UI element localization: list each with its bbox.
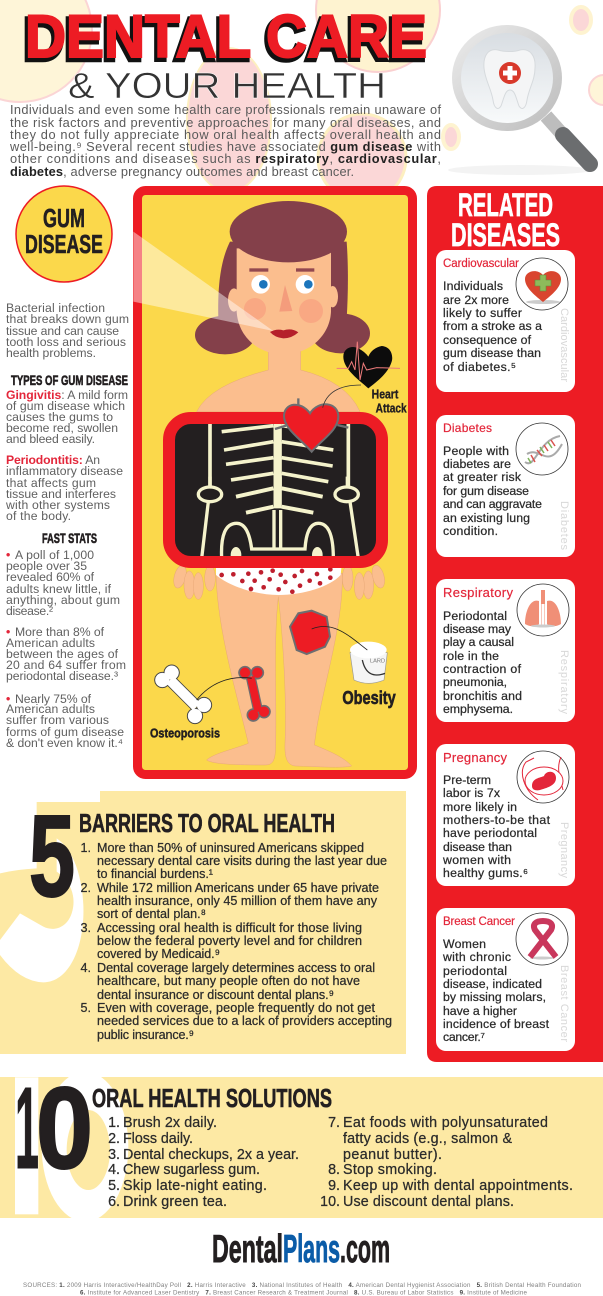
icon: fetus <box>517 751 569 803</box>
barrier list: Even with coverage, people frequently do not get <box>97 1001 376 1015</box>
solutions list right: 10. <box>320 1194 340 1210</box>
stat: 75 percent: & don't even know it.⁴ <box>6 736 123 750</box>
stat: poll: disease.² <box>6 604 53 618</box>
card: breast cancer: disease, indicated <box>443 977 542 991</box>
barrier list: health insurance, only 45 million of them have any <box>97 894 378 908</box>
panel: 10 oral health solutions <box>0 1077 603 1218</box>
panel: gum disease sidebar <box>5 186 129 750</box>
card: cardiovascular: are 2x more <box>443 293 509 307</box>
heart attack callout <box>275 342 407 452</box>
barrier list: Accessing oral health is difficult for those living <box>97 921 362 935</box>
big number 10: 1 <box>15 1063 39 1193</box>
barrier list: Dental coverage largely determines access to oral <box>97 961 375 975</box>
logo: DentalPlans.com: Plans <box>283 1228 340 1271</box>
stat: 8 percent: American adults <box>6 636 95 650</box>
card: diabetes: Diabetes <box>443 421 492 435</box>
solutions list right: 9. <box>328 1178 340 1194</box>
card: pregnancy: Pre-term <box>443 773 491 787</box>
heading: related diseases: RELATED <box>458 187 553 223</box>
background bubbles <box>0 0 603 202</box>
title: DENTAL CARE <box>25 3 427 70</box>
heading: related diseases <box>451 187 560 253</box>
card: cardiovascular <box>436 250 575 392</box>
card: diabetes: Diabetes <box>558 501 570 550</box>
barrier list: public insurance.⁹ <box>97 1028 194 1042</box>
barrier list: While 172 million Americans under 65 have private <box>97 881 379 895</box>
definition text: tooth loss and serious <box>6 335 126 349</box>
card: breast cancer: Breast Cancer <box>558 965 570 1042</box>
gingivitis text: causes the gums to <box>6 410 113 424</box>
heading: barriers: BARRIERS TO ORAL HEALTH <box>79 808 335 838</box>
stat: 8 percent: between the ages of <box>6 647 119 661</box>
card: breast cancer: cancer.⁷ <box>443 1030 485 1044</box>
stat: poll <box>6 548 120 618</box>
heart attack callout: Heart <box>372 387 399 401</box>
heading: solutions: ORAL HEALTH SOLUTIONS <box>92 1083 332 1113</box>
card: diabetes: an existing lung <box>443 511 530 525</box>
card: diabetes: People with <box>443 444 509 458</box>
card: breast cancer: Women <box>443 937 486 951</box>
solutions list left: 2. <box>108 1131 120 1147</box>
panel: body illustration <box>133 190 412 774</box>
stat: poll: A poll of 1,000 <box>15 548 94 562</box>
obesity callout: Obesity <box>342 687 396 708</box>
solutions list right: Keep up with dental appointments. <box>343 1178 573 1194</box>
card: pregnancy: women with <box>442 853 511 867</box>
card: respiratory: play a causal <box>443 635 514 649</box>
solutions list left: Drink green tea. <box>123 1194 227 1210</box>
solutions list right: peanut butter). <box>343 1147 442 1163</box>
osteoporosis callout: Osteoporosis <box>150 725 220 740</box>
barrier list: 1. <box>80 841 91 855</box>
solutions list left <box>108 1115 299 1210</box>
card: pregnancy: more likely in <box>443 800 517 814</box>
backdrop with large pale 5 <box>0 791 406 1054</box>
subtitle: & YOUR HEALTH <box>68 65 386 106</box>
stat: 75 percent: suffer from various <box>6 713 109 727</box>
stat: 8 percent: 20 and 64 suffer from <box>6 658 126 672</box>
card: respiratory: contraction of <box>443 662 522 676</box>
card: pregnancy: have periodontal <box>443 826 537 840</box>
backdrop with large pale 10 <box>0 1072 603 1222</box>
card: diabetes: condition. <box>443 524 498 538</box>
intro paragraph <box>9 102 441 179</box>
periodontitis text <box>5 453 123 523</box>
intro paragraph: the risk factors and preventive approaches for many oral diseases, and <box>10 115 441 130</box>
stat: 8 percent <box>6 625 126 683</box>
card: pregnancy: healthy gums.⁶ <box>443 866 528 880</box>
logo: DentalPlans.com: .com <box>340 1228 390 1271</box>
card: breast cancer: have a higher <box>443 1004 517 1018</box>
panel: related diseases <box>427 186 603 1062</box>
solutions list right: 7. <box>328 1115 340 1131</box>
icon: awareness ribbon <box>516 913 568 965</box>
card: diabetes: at greater risk <box>443 470 522 484</box>
icon: heart with cross <box>516 258 568 310</box>
stat: 8 percent: • <box>6 625 10 639</box>
card: cardiovascular: Cardiovascular <box>558 308 570 382</box>
card: diabetes: diabetes are <box>443 457 511 471</box>
badge: gum disease <box>16 186 112 282</box>
card: breast cancer: with chronic <box>442 950 511 964</box>
stat: poll: people over 35 <box>6 559 87 573</box>
stat: poll: • <box>6 548 10 562</box>
card: respiratory: role in the <box>443 649 499 663</box>
card: pregnancy <box>436 744 575 886</box>
stat: 75 percent: Nearly 75% of <box>15 692 92 706</box>
card: breast cancer: incidence of breast <box>443 1017 550 1031</box>
solutions list right: fatty acids (e.g., salmon & <box>343 1131 512 1147</box>
card: respiratory: disease may <box>443 622 512 636</box>
card: pregnancy: mothers-to-be that <box>443 813 551 827</box>
barrier list: 5. <box>80 1001 91 1015</box>
barrier list: necessary dental care visits during the last year due <box>97 854 387 868</box>
card: cardiovascular: Cardiovascular <box>443 258 519 270</box>
osteoporosis callout <box>150 665 271 740</box>
card: cardiovascular: from a stroke as a <box>443 319 542 333</box>
solutions list left: 5. <box>108 1178 120 1194</box>
barrier list: 3. <box>80 921 91 935</box>
card: cardiovascular: of diabetes.⁵ <box>443 360 516 374</box>
solutions list left: Brush 2x daily. <box>123 1115 217 1131</box>
card: respiratory: Respiratory <box>558 650 570 714</box>
solutions list left: Floss daily. <box>123 1131 193 1147</box>
periodontitis text: with other systems <box>5 498 110 512</box>
logo: DentalPlans.com <box>212 1228 390 1271</box>
solutions list right: Stop smoking. <box>343 1162 437 1178</box>
barrier list <box>80 841 392 1042</box>
stat: 8 percent: More than 8% of <box>15 625 105 639</box>
card: diabetes <box>436 415 575 557</box>
card: pregnancy: labor is 7x <box>443 786 501 800</box>
periodontitis text: Periodontitis: An <box>6 453 100 467</box>
periodontitis text: of the body. <box>6 509 71 523</box>
card: breast cancer: periodontal <box>443 964 507 978</box>
icon: dna helix <box>516 423 568 475</box>
gingivitis text: of gum disease which <box>6 399 125 413</box>
intro paragraph: Individuals and even some health care professionals remain unaware of <box>10 102 441 117</box>
card: breast cancer <box>436 908 575 1051</box>
card: diabetes: and can aggravate <box>443 497 542 511</box>
badge: gum disease: DISEASE <box>25 229 103 259</box>
card: cardiovascular: Individuals <box>443 279 503 293</box>
definition text: that breaks down gum <box>6 312 129 326</box>
barrier list: 2. <box>80 881 91 895</box>
periodontitis text: tissue and interferes <box>6 487 116 501</box>
card: cardiovascular: gum disease than <box>443 346 541 360</box>
solutions list left: 6. <box>108 1194 120 1210</box>
periodontitis text: inflammatory disease <box>6 464 123 478</box>
obesity callout <box>290 611 396 708</box>
stat: 75 percent: forms of gum disease <box>6 725 124 739</box>
solutions list right: Eat foods with polyunsaturated <box>343 1115 548 1131</box>
barrier list: to financial burdens.¹ <box>97 867 213 881</box>
card: respiratory: bronchitis and <box>443 689 522 703</box>
card: cardiovascular: consequence of <box>443 333 532 347</box>
card: breast cancer: by missing molars, <box>443 990 546 1004</box>
solutions list right <box>320 1115 573 1210</box>
card: pregnancy: Pregnancy <box>558 822 570 878</box>
stat: 75 percent <box>6 692 124 750</box>
solutions list left: 4. <box>108 1162 120 1178</box>
card: respiratory: emphysema. <box>443 702 513 716</box>
icon: magnifying glass with tooth <box>448 25 592 175</box>
title: DENTAL CARE <box>23 6 425 73</box>
figure head and shoulders <box>133 201 370 412</box>
barrier list: covered by Medicaid.⁹ <box>97 947 220 961</box>
definition text: tissue and can cause <box>6 324 119 338</box>
sources: SOURCES: 1. 2009 Harris Interactive/HealthDay Poll 2. Harris Interactive 3. National Institutes of Health 4. American Dental Hygienist Association 5. British Dental Health Foundation <box>23 1282 582 1289</box>
card: cardiovascular: likely to suffer <box>443 306 522 320</box>
periodontitis text: that affects gum <box>6 476 96 490</box>
intro paragraph: they do not fully appreciate how oral health affects overall health and <box>10 127 441 142</box>
big number 5: 5 <box>29 791 75 921</box>
badge: gum disease: GUM <box>43 203 85 233</box>
barrier list: sort of dental plan.⁸ <box>97 907 206 921</box>
intro paragraph: well-being.⁹ Several recent studies have associated gum disease with <box>9 139 441 154</box>
heading: fast stats: FAST STATS <box>42 530 97 546</box>
solutions list right: 8. <box>328 1162 340 1178</box>
definition text: health problems. <box>6 346 96 360</box>
gingivitis text <box>6 388 128 446</box>
barrier list: dental insurance or discount dental plans.⁹ <box>97 988 334 1002</box>
figure lower body <box>172 564 387 767</box>
heading: types of gum disease: TYPES OF GUM DISEASE <box>11 372 128 388</box>
big number 10: 0 <box>36 1063 93 1193</box>
card: pregnancy: disease than <box>443 840 512 854</box>
card: breast cancer: Breast Cancer <box>443 916 515 928</box>
stat: poll: revealed 60% of <box>6 570 95 584</box>
solutions list left: Dental checkups, 2x a year. <box>123 1147 299 1163</box>
stat: poll: anything, about gum <box>6 593 120 607</box>
panel: 5 barriers to oral health <box>0 791 406 1054</box>
stat: 8 percent: periodontal disease.³ <box>6 669 118 683</box>
solutions list left: Chew sugarless gum. <box>123 1162 260 1178</box>
card: respiratory: Periodontal <box>443 609 507 623</box>
gingivitis text: Gingivitis: A mild form <box>6 388 128 402</box>
logo: DentalPlans.com: Dental <box>212 1228 283 1271</box>
solutions list right: Use discount dental plans. <box>343 1194 514 1210</box>
barrier list: below the federal poverty level and for children <box>97 934 362 948</box>
icon: lungs <box>517 584 569 636</box>
definition text: Bacterial infection <box>6 301 105 315</box>
barrier list: More than 50% of uninsured Americans skipped <box>97 841 364 855</box>
intro paragraph: other conditions and diseases such as respiratory, cardiovascular, <box>10 151 441 166</box>
barrier list: healthcare, but many people often do not have <box>97 974 360 988</box>
stat: poll: adults knew little, if <box>6 582 112 596</box>
solutions list left: 3. <box>108 1147 120 1163</box>
gingivitis text: and bleed easily. <box>6 432 95 446</box>
intro paragraph: diabetes, adverse pregnancy outcomes and breast cancer. <box>10 164 354 179</box>
card: respiratory: Respiratory <box>443 585 514 600</box>
gingivitis text: become red, swollen <box>6 421 118 435</box>
obesity callout: LARD <box>370 658 385 664</box>
card: respiratory <box>436 579 575 722</box>
solutions list left: Skip late-night eating. <box>123 1178 267 1194</box>
sources <box>23 1282 582 1296</box>
card: pregnancy: Pregnancy <box>443 750 508 765</box>
heart attack callout: Attack <box>376 401 407 415</box>
x-ray frame with skeleton <box>169 418 382 563</box>
stat: 75 percent: • <box>6 692 10 706</box>
barrier list: 4. <box>80 961 91 975</box>
barrier list: needed services due to a lack of providers accepting <box>97 1014 392 1028</box>
definition text <box>6 301 129 360</box>
stat: 75 percent: American adults <box>6 702 95 716</box>
card: respiratory: pneumonia, <box>443 675 507 689</box>
card: diabetes: for gum disease <box>443 484 529 498</box>
solutions list left: 1. <box>108 1115 120 1131</box>
